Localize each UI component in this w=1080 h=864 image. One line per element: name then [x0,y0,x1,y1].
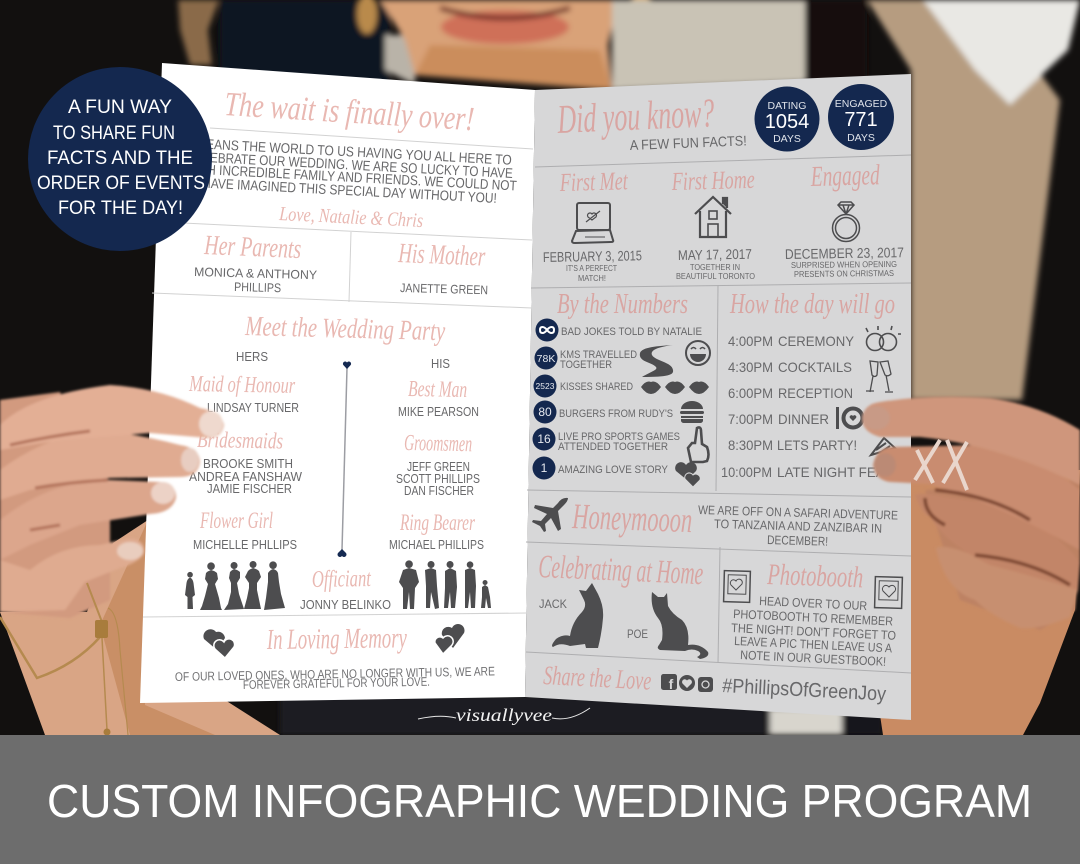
badge values: 78K [537,353,555,365]
welcome paragraph [182,135,518,206]
panel: by the numbers [532,289,710,487]
welcome paragraph: HAVE IMAGINED THIS SPECIAL DAY WITHOUT YOU! [202,175,497,206]
icon: two hearts [675,462,700,487]
milestone: first home [671,165,755,281]
milestone: first met [543,166,642,283]
callout: navy circle [28,67,212,251]
number badges [532,318,558,480]
left hand [0,385,224,736]
subheading: A FEW FUN FACTS! [629,132,747,153]
icon: burger [680,401,704,423]
groom party silhouettes [399,560,491,609]
photobooth details: LEAVE A PIC THEN LEAVE US A [734,634,893,655]
schedule: 6:00PM [728,385,773,401]
left forearm behind page [0,520,280,735]
welcome paragraph: IT MEANS THE WORLD TO US HAVING YOU ALL HERE TO [182,135,512,168]
panel: share the love [543,660,887,706]
schedule: 7:00PM [728,411,773,427]
badge: engaged days [828,84,894,150]
memorial text: OF OUR LOVED ONES, WHO ARE NO LONGER WITH US, WE ARE [175,664,495,684]
honeymoon details: TO TANZANIA AND ZANZIBAR IN [714,517,882,536]
signature: Love, Natalie & Chris [278,203,424,232]
callout: navy circle: A FUN WAY [68,97,172,118]
schedule: DINNER [778,411,829,427]
panel: photobooth: Photobooth [766,558,864,594]
schedule: 4:30PM [728,359,773,375]
honeymoon details: DECEMBER! [767,533,828,549]
milestone: first met: FEBRUARY 3, 2015 [543,247,642,265]
his column: HIS [431,357,450,371]
officiant block: JONNY BELINKO [300,598,391,612]
hers column: BROOKE SMITH [203,457,293,471]
welcome paragraph: CELEBRATE OUR WEDDING. WE ARE SO LUCKY TO HAVE [187,148,513,181]
icon: house [695,197,731,237]
officiant block [300,566,391,612]
schedule: CEREMONY [778,333,855,349]
milestone: first home: BEAUTIFUL TORONTO [676,271,755,281]
callout: navy circle: FOR THE DAY! [58,198,183,219]
milestone: first home: TOGETHER IN [690,262,740,272]
icon: cat jack [552,583,603,648]
panel: photobooth [724,558,902,669]
hers column: Flower Girl [199,508,273,533]
icon: photo frame left [724,571,750,602]
left page of program [140,63,535,703]
panel: how the day will go [721,289,902,480]
hers column: Bridesmaids [197,427,283,454]
schedule: 10:00PM [721,464,772,480]
badge values: 16 [537,432,551,446]
badge: dating days: DATING [768,100,806,112]
callout: navy circle: ORDER OF EVENTS [37,173,205,194]
icon: champagne flutes [866,361,893,392]
schedule: 4:00PM [728,333,773,349]
right page of program [525,74,911,720]
badge: dating days: 1054 [765,111,809,133]
hers column: ANDREA FANSHAW [189,470,302,484]
photobooth details: HEAD OVER TO OUR [759,594,867,613]
heading: did you know: Did you know? [556,89,716,142]
schedule: LATE NIGHT FEAST [777,464,902,480]
badge: engaged days: DAYS [847,132,875,144]
badge values: 2523 [536,381,555,391]
icon: road [640,345,673,377]
milestone: first home: First Home [671,165,755,196]
milestone: engaged: SURPRISED WHEN OPENING [791,259,897,270]
schedule [721,333,902,480]
honeymoon details [698,503,898,549]
icon: wedding rings [866,326,901,350]
panel: how the day will go: How the day will go [729,289,895,320]
icon: heart [679,675,695,691]
panel: honeymoon [532,496,898,549]
bracelet [0,583,128,736]
milestone: engaged: PRESENTS ON CHRISTMAS [794,268,894,279]
fact labels: BURGERS FROM RUDY'S [559,408,673,420]
schedule: RECEPTION [778,385,853,401]
panel: celebrating at home: POE [627,629,648,641]
panel: celebrating at home [538,549,708,659]
parents block: Her Parents [203,230,302,265]
icon: hearts right [435,624,465,654]
milestone: engaged: Engaged [810,159,880,193]
icon: facebook [661,674,677,692]
icon: foam finger [688,427,708,462]
fact labels: BAD JOKES TOLD BY NATALIE [561,326,702,338]
badge values: 80 [538,405,552,419]
bottom banner [0,735,1080,864]
fact labels: ATTENDED TOGETHER [558,441,668,453]
parents block: His Mother [397,238,486,273]
heading: meet the wedding party: Meet the Wedding Party [244,311,446,347]
hers column: JAMIE FISCHER [207,482,292,496]
badge: dating days [754,86,820,152]
badge: engaged days: 771 [844,109,878,131]
fact labels: TOGETHER [560,359,612,371]
welcome paragraph: SUCH INCREDIBLE FAMILY AND FRIENDS. WE COULD NOT [182,160,518,194]
icon: cat poe [652,592,708,659]
icon: hearts left [203,629,235,658]
centre line with hearts [338,362,351,557]
parents block [194,230,488,297]
icon: facebook: f [669,676,674,692]
icon: diamond ring [832,202,860,242]
his column: MIKE PEARSON [398,405,479,419]
parents block: JANETTE GREEN [400,281,488,297]
hers column: LINDSAY TURNER [207,401,299,415]
his column: Best Man [408,376,467,402]
his column: Ring Bearer [399,510,476,535]
photobooth details [731,594,897,669]
badge values [536,327,555,475]
honeymoon details: WE ARE OFF ON A SAFARI ADVENTURE [698,503,898,523]
parents block: MONICA & ANTHONY [194,265,318,282]
icon: photo frame right [875,577,902,608]
schedule: COCKTAILS [778,359,852,375]
hers column: MICHELLE PHLLIPS [193,538,297,552]
his column: Groomsmen [404,430,472,456]
his column: DAN FISCHER [404,484,474,498]
fact labels: KISSES SHARED [560,381,633,393]
his column [389,357,484,552]
milestone: first met: First Met [559,166,629,197]
photobooth details: THE NIGHT! DON'T FORGET TO [731,621,897,643]
milestone: engaged [785,159,904,279]
panel: share the love: Share the Love [543,660,652,696]
hers column: HERS [236,350,268,364]
fact labels: AMAZING LOVE STORY [558,464,669,476]
callout: navy circle: FACTS AND THE [47,148,193,169]
rings [915,440,967,490]
his column: SCOTT PHILLIPS [396,472,480,486]
callout: navy circle: TO SHARE FUN [53,123,175,144]
icon: instagram [698,677,713,692]
bride party silhouettes [185,561,285,610]
left page dividers [143,128,533,617]
milestone: first met: MATCH! [578,273,606,283]
right hand [862,397,1080,630]
icon: plate and fork [836,407,862,429]
heading: in loving memory: In Loving Memory [266,622,407,656]
schedule: 8:30PM [728,437,773,453]
schedule: LETS PARTY! [777,437,857,453]
panel: celebrating at home: JACK [539,599,567,611]
fact labels: LIVE PRO SPORTS GAMES [558,431,680,443]
panel: by the numbers: By the Numbers [557,289,688,320]
fact labels: KMS TRAVELLED [560,349,637,361]
memorial text: FOREVER GRATEFUL FOR YOUR LOVE. [243,675,430,692]
watermark: visuallyvee [456,705,552,725]
hers column [188,350,302,552]
heading: the wait is finally over: The wait is finally over! [224,86,475,138]
panel: honeymoon: Honeymooon [571,496,693,540]
badge: dating days: DAYS [773,133,801,145]
officiant block: Officiant [312,566,372,593]
right page dividers [526,155,911,673]
hers column: Maid of Honour [188,371,296,398]
parents block: PHILLIPS [234,280,281,295]
his column: JEFF GREEN [407,460,470,474]
hashtag: #PhillipsOfGreenJoy [722,675,887,706]
milestone: first home: MAY 17, 2017 [678,246,752,263]
fact labels [558,326,702,476]
panel: celebrating at home: Celebrating at Home [538,549,704,592]
photobooth details: NOTE IN OUR GUESTBOOK! [740,648,886,669]
watermark [418,705,590,725]
badge values: 1 [541,461,548,475]
icon: airplane [532,498,568,532]
icon: party hat [871,438,895,455]
milestone: engaged: DECEMBER 23, 2017 [785,244,904,262]
milestone: first met: IT'S A PERFECT [566,263,617,273]
icon: laptop [572,203,613,243]
banner title: CUSTOM INFOGRAPHIC WEDDING PROGRAM [47,775,1032,827]
right forearm behind page [880,470,1080,735]
badge: engaged days: ENGAGED [835,98,888,110]
icon: lips [641,382,709,394]
icon: laughing face [686,341,710,365]
his column: MICHAEL PHILLIPS [389,538,484,552]
memorial text [175,664,495,692]
photobooth details: PHOTOBOOTH TO REMEMBER [733,607,893,629]
